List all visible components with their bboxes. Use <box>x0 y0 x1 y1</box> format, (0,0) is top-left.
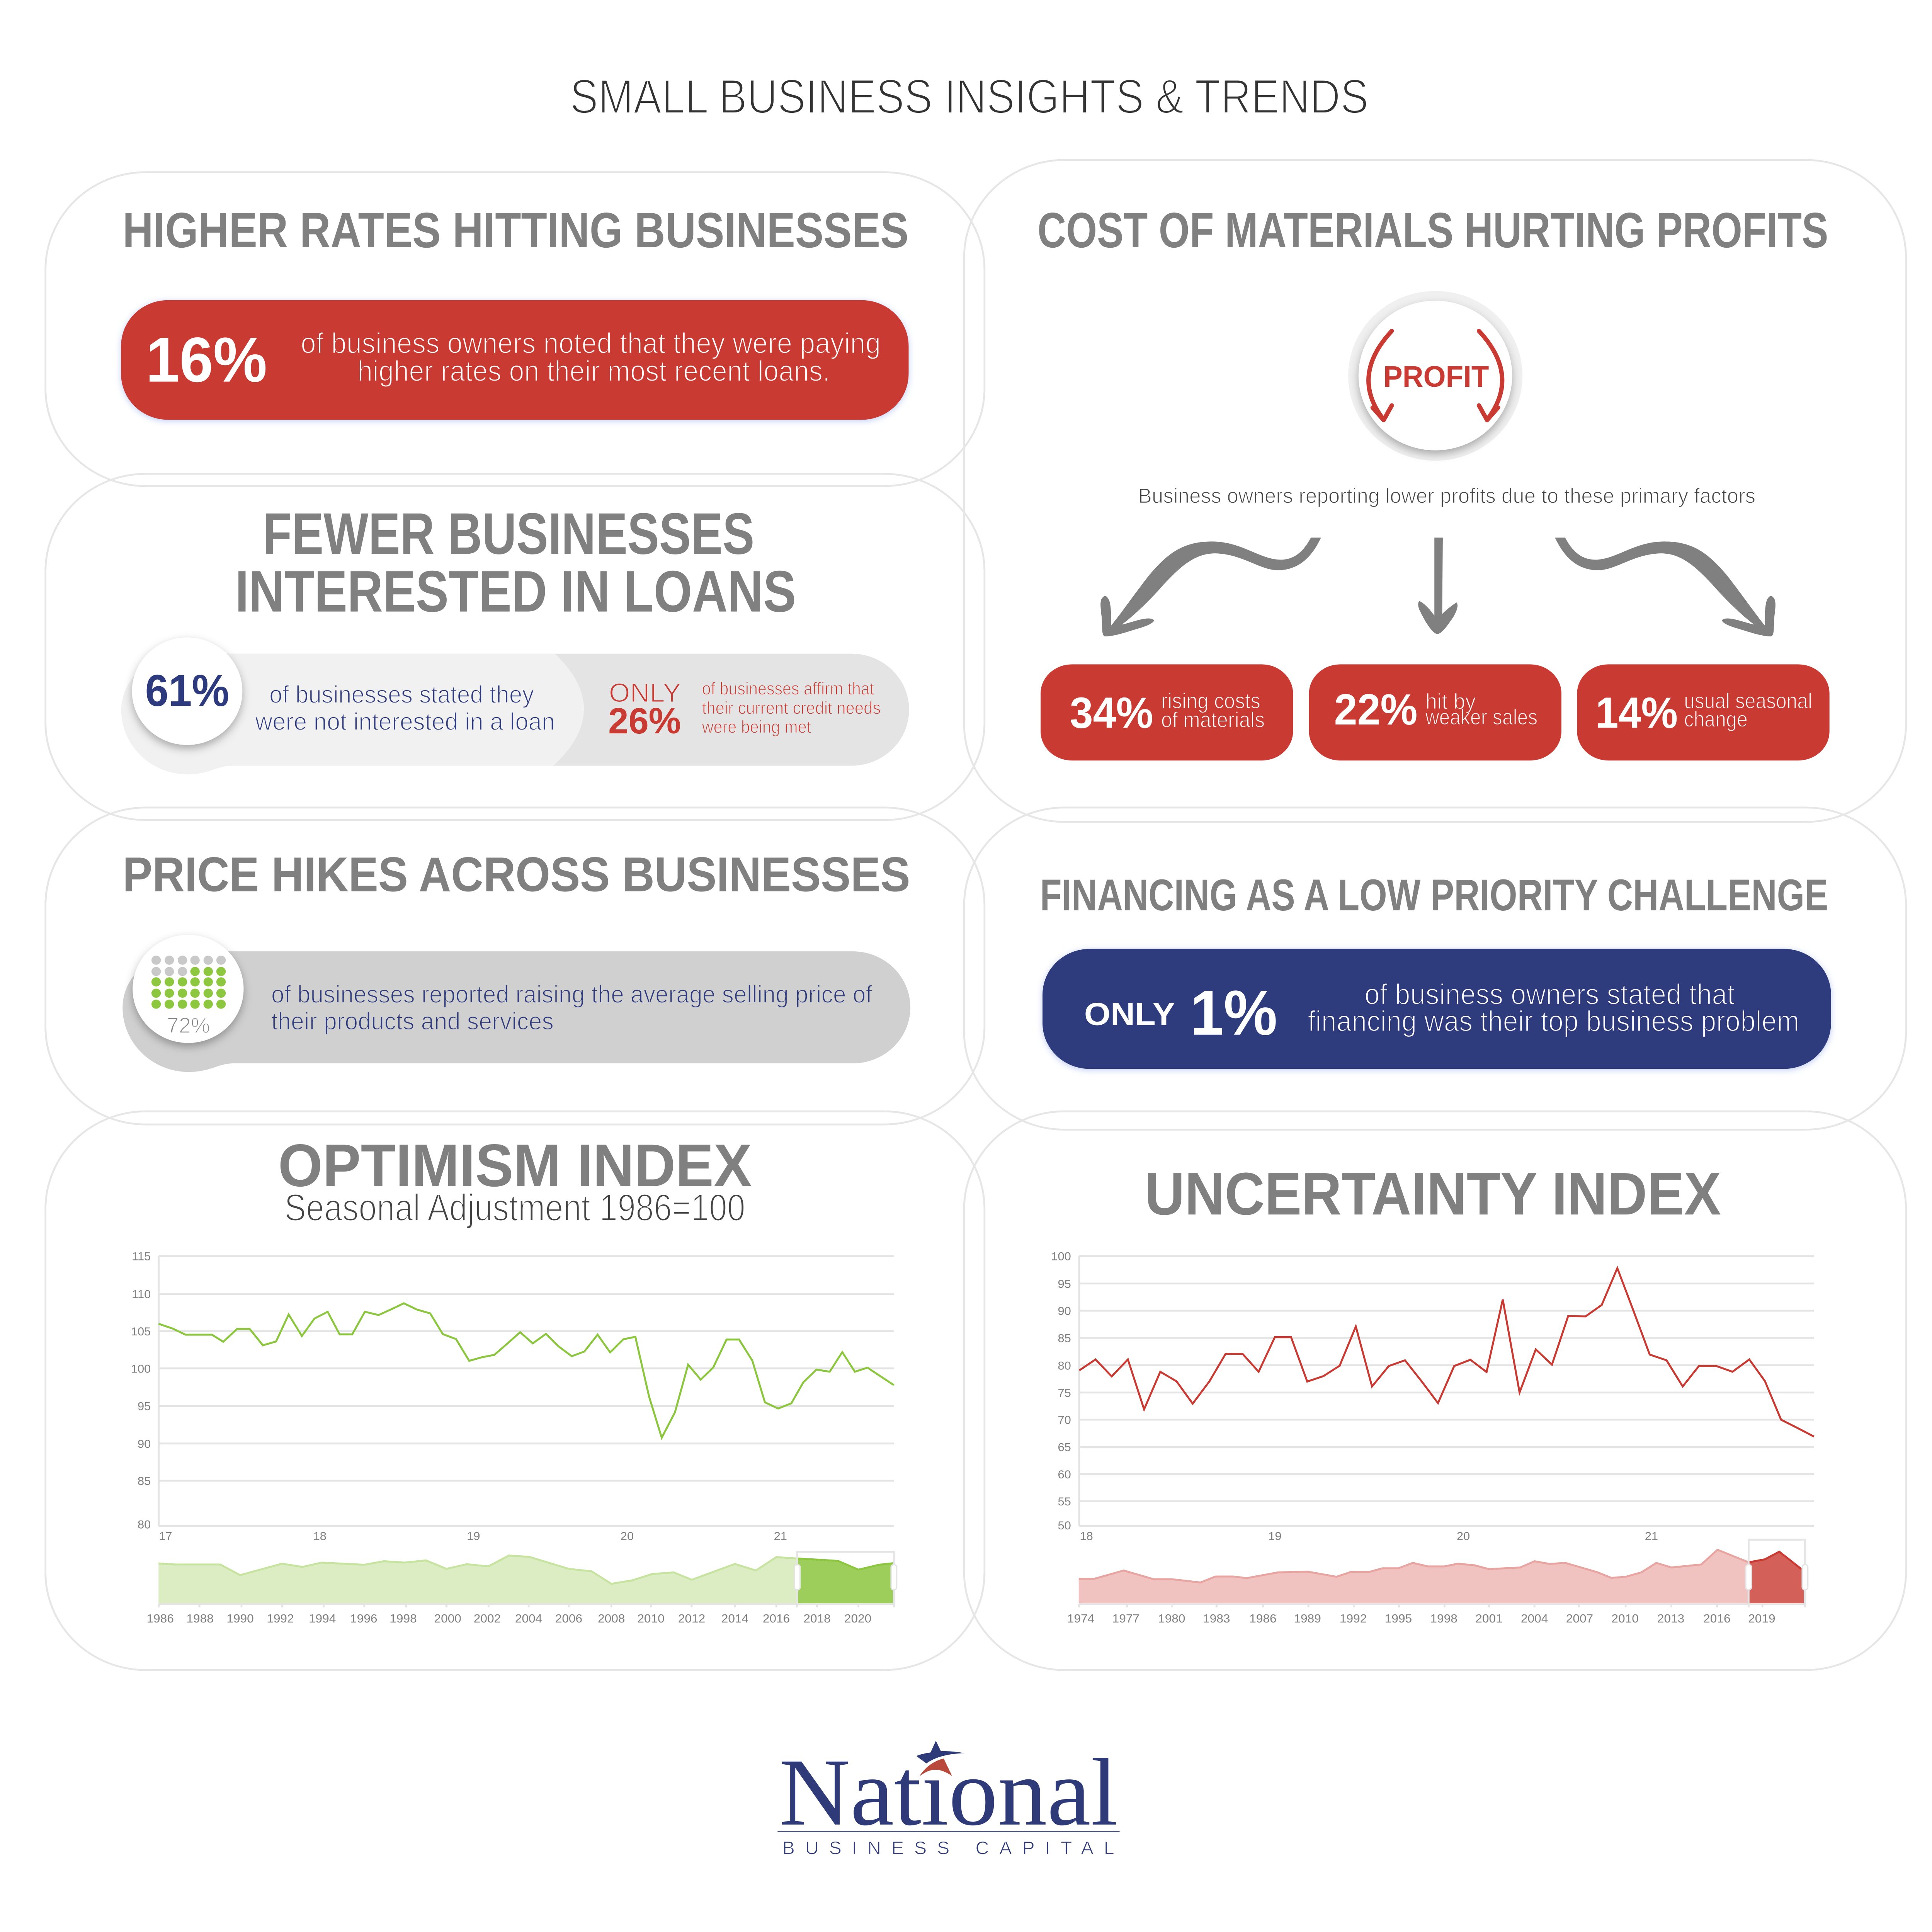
range selector: optimism: 2018 <box>803 1612 831 1625</box>
callout: loans pill: of businesses stated they <box>269 681 534 708</box>
range selector: uncertainty: 1995 <box>1385 1612 1412 1625</box>
range selector: optimism: 2010 <box>637 1612 665 1625</box>
range selector: optimism: 1996 <box>350 1612 377 1625</box>
heading: price hikes: PRICE HIKES ACROSS BUSINESSES <box>122 847 910 902</box>
line chart: uncertainty: 55 <box>1058 1495 1071 1508</box>
stat box: 34 percent: rising costs <box>1161 689 1260 713</box>
line chart: uncertainty: 80 <box>1058 1359 1071 1372</box>
range selector: optimism: 2006 <box>555 1612 582 1625</box>
heading: fewer businesses: INTERESTED IN LOANS <box>235 559 796 624</box>
stat box: 22 percent: weaker sales <box>1425 705 1537 730</box>
line chart: optimism: 20 <box>621 1530 634 1543</box>
range selector: uncertainty: 1992 <box>1340 1612 1367 1625</box>
callout: 1 percent: ONLY <box>1084 996 1175 1032</box>
callout: 1 percent: financing was their top business problem <box>1308 1005 1799 1037</box>
line chart: optimism: 21 <box>774 1530 787 1543</box>
icon: profit circle <box>1348 291 1522 461</box>
callout: loans pill: ONLY <box>609 678 681 707</box>
range selector: uncertainty <box>1067 1540 1808 1625</box>
range selector: optimism: 2008 <box>598 1612 625 1625</box>
callout: price pill <box>122 935 910 1072</box>
callout: 1 percent <box>1043 949 1831 1069</box>
line chart: uncertainty: 60 <box>1058 1468 1071 1481</box>
callout: 16 percent <box>121 300 909 420</box>
callout: 1 percent: 1% <box>1190 978 1277 1048</box>
range selector: optimism: 2016 <box>763 1612 790 1625</box>
range selector: uncertainty: 2013 <box>1657 1612 1684 1625</box>
callout: 16 percent: 16% <box>146 325 267 395</box>
panel: price hikes <box>46 808 985 1124</box>
stat box: 34 percent: of materials <box>1161 708 1265 732</box>
panel: uncertainty index <box>964 1111 1906 1670</box>
line chart: optimism: 95 <box>138 1400 151 1413</box>
range selector: uncertainty: 1986 <box>1249 1612 1277 1625</box>
range selector: uncertainty: 1998 <box>1430 1612 1458 1625</box>
range selector: optimism: 1998 <box>389 1612 417 1625</box>
line chart: uncertainty: 75 <box>1058 1386 1071 1400</box>
range selector: uncertainty: 1974 <box>1067 1612 1094 1625</box>
line chart: optimism: 85 <box>138 1475 151 1488</box>
line chart: optimism: 18 <box>313 1530 327 1543</box>
heading: fewer businesses <box>235 501 796 624</box>
line chart: uncertainty: 95 <box>1058 1277 1071 1291</box>
callout: loans pill: were being met <box>702 717 811 736</box>
callout: price pill: 72% <box>167 1014 210 1038</box>
callout: loans pill: 26% <box>608 701 681 742</box>
range selector: uncertainty: 2001 <box>1475 1612 1503 1625</box>
line chart: uncertainty: 65 <box>1058 1441 1071 1454</box>
heading: uncertainty index: UNCERTAINTY INDEX <box>1145 1160 1721 1228</box>
range selector: optimism: 1988 <box>187 1612 214 1625</box>
line chart: optimism: 90 <box>138 1437 151 1451</box>
range selector: uncertainty: 1977 <box>1112 1612 1139 1625</box>
line chart: uncertainty: 21 <box>1645 1530 1658 1543</box>
logo: National Business Capital: BUSINESS CAPITAL <box>782 1838 1114 1858</box>
range selector: optimism: 2020 <box>844 1612 871 1625</box>
range selector: uncertainty: 2010 <box>1611 1612 1639 1625</box>
range selector: optimism: 2000 <box>434 1612 461 1625</box>
callout: 16 percent: higher rates on their most recent loans. <box>357 355 830 388</box>
stat box: 22 percent: hit by <box>1425 689 1476 714</box>
callout: 16 percent: of business owners noted that they were paying <box>301 327 881 360</box>
stat box: 22 percent <box>1309 664 1561 760</box>
callout: loans pill <box>121 638 909 774</box>
panel: higher rates <box>46 172 985 486</box>
line chart: optimism: 100 <box>131 1362 151 1375</box>
range selector: optimism: 1992 <box>267 1612 294 1625</box>
callout: price pill: their products and services <box>271 1007 554 1035</box>
range selector: optimism: 2002 <box>474 1612 501 1625</box>
line chart: optimism: 80 <box>138 1518 151 1531</box>
range selector: optimism: 2012 <box>678 1612 705 1625</box>
panel: cost of materials <box>964 160 1906 822</box>
line chart: optimism: 105 <box>131 1325 151 1338</box>
callout: loans pill: were not interested in a loan <box>255 708 555 735</box>
line chart: optimism <box>131 1250 894 1543</box>
line chart: uncertainty: 100 <box>1051 1250 1071 1263</box>
caption: lower profits: Business owners reporting lower profits due to these primary factors <box>1138 484 1755 507</box>
stat box: 34 percent: 34% <box>1070 689 1153 737</box>
line chart: optimism: 19 <box>467 1530 480 1543</box>
callout: 1 percent: of business owners stated that <box>1364 978 1735 1011</box>
logo: National Business Capital: National <box>779 1739 1118 1845</box>
stat box: 14 percent: 14% <box>1595 689 1678 737</box>
title: SMALL BUSINESS INSIGHTS & TRENDS <box>570 70 1369 124</box>
range selector: optimism <box>146 1552 897 1625</box>
range selector: optimism: 1990 <box>226 1612 254 1625</box>
stat box: 14 percent <box>1577 664 1830 760</box>
stat box: 14 percent: usual seasonal <box>1684 689 1812 713</box>
stat box: 34 percent <box>1041 664 1293 760</box>
icon: profit circle: PROFIT <box>1383 360 1489 393</box>
arrow: left <box>1100 537 1321 636</box>
heading: higher rates: HIGHER RATES HITTING BUSINESSES <box>122 202 909 258</box>
line chart: uncertainty <box>1051 1250 1814 1543</box>
range selector: uncertainty: 2019 <box>1748 1612 1776 1625</box>
icon: star <box>914 1741 965 1777</box>
range selector: uncertainty: 2004 <box>1521 1612 1548 1625</box>
panel: financing <box>964 808 1906 1130</box>
icon: dot grid 72 percent <box>151 956 226 1009</box>
heading: optimism index: OPTIMISM INDEX <box>278 1132 752 1199</box>
range selector: uncertainty: 2007 <box>1566 1612 1593 1625</box>
subheading: seasonal adjustment: Seasonal Adjustment 1986=100 <box>284 1186 745 1229</box>
line chart: optimism: 115 <box>132 1250 151 1263</box>
callout: loans pill: their current credit needs <box>702 698 881 718</box>
callout: loans pill: of businesses affirm that <box>702 679 874 698</box>
range selector: uncertainty: 1989 <box>1294 1612 1321 1625</box>
line chart: uncertainty: 20 <box>1457 1530 1470 1543</box>
line chart: uncertainty: 70 <box>1058 1414 1071 1427</box>
stat box: 22 percent: 22% <box>1334 685 1417 734</box>
range selector: optimism: 1994 <box>309 1612 336 1625</box>
callout: loans pill: 61% <box>145 665 229 715</box>
line chart: optimism: 17 <box>159 1530 172 1543</box>
arrow: middle <box>1418 537 1458 634</box>
range selector: uncertainty: 1980 <box>1158 1612 1185 1625</box>
line chart: optimism: 110 <box>132 1288 151 1301</box>
callout: price pill: of businesses reported raising the average selling price of <box>271 981 872 1008</box>
range selector: uncertainty: 1983 <box>1203 1612 1230 1625</box>
line chart: uncertainty: 90 <box>1058 1304 1071 1318</box>
range selector: optimism: 1986 <box>146 1612 174 1625</box>
stat box: 14 percent: change <box>1684 707 1748 731</box>
range selector: optimism: 2004 <box>515 1612 542 1625</box>
range selector: optimism: 2014 <box>721 1612 748 1625</box>
line chart: uncertainty: 19 <box>1268 1530 1282 1543</box>
arrow: right <box>1555 537 1776 636</box>
line chart: uncertainty: 50 <box>1058 1519 1071 1532</box>
line chart: uncertainty: 18 <box>1080 1530 1093 1543</box>
line chart: uncertainty: 85 <box>1058 1332 1071 1345</box>
panel: optimism index <box>46 1111 985 1670</box>
panel: fewer businesses <box>46 474 985 820</box>
range selector: uncertainty: 2016 <box>1703 1612 1731 1625</box>
heading: fewer businesses: FEWER BUSINESSES <box>263 501 754 566</box>
